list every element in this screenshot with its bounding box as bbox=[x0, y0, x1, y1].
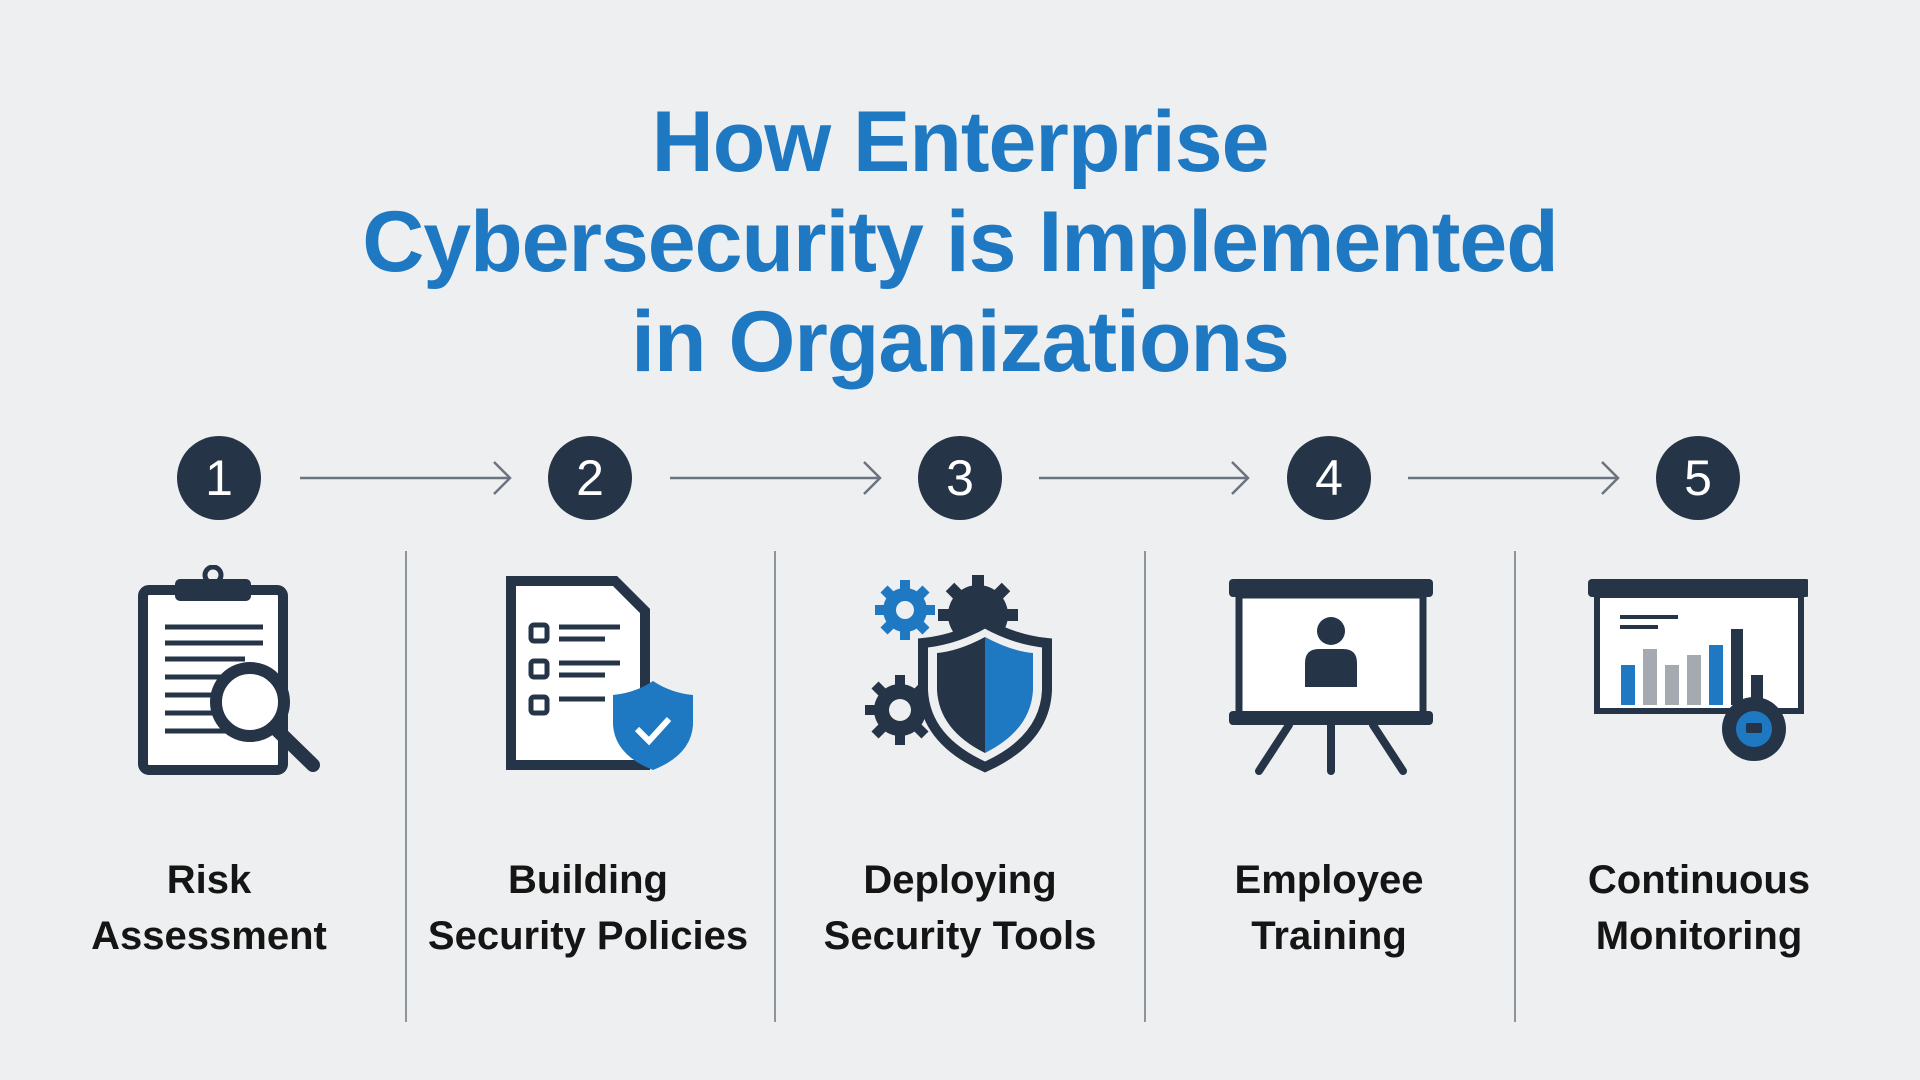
number 4: 4 bbox=[1315, 450, 1343, 506]
number 2: 2 bbox=[576, 450, 604, 506]
label 1: Assessment bbox=[91, 914, 327, 958]
icon: monitoring dashboard bbox=[1588, 579, 1808, 761]
label 3: Security Tools bbox=[824, 914, 1096, 958]
label 3: Deploying bbox=[863, 858, 1057, 902]
icon: presentation board bbox=[1229, 579, 1433, 775]
number 3 bbox=[918, 436, 1002, 520]
number 4 bbox=[1287, 436, 1371, 520]
label 1: Risk bbox=[167, 858, 251, 902]
icon: gears and shield bbox=[865, 575, 1052, 772]
label 5 bbox=[1588, 858, 1810, 958]
label 2 bbox=[428, 858, 748, 958]
icon: policy document with shield bbox=[506, 576, 693, 770]
label 2: Building bbox=[508, 858, 668, 902]
number 2 bbox=[548, 436, 632, 520]
number 5 bbox=[1656, 436, 1740, 520]
title: How Enterprise bbox=[652, 94, 1268, 190]
title: in Organizations bbox=[631, 294, 1289, 390]
label 4 bbox=[1235, 858, 1423, 958]
step numbers and arrows bbox=[177, 436, 1740, 520]
label 5: Continuous bbox=[1588, 858, 1810, 902]
number 5: 5 bbox=[1684, 450, 1712, 506]
label 5: Monitoring bbox=[1596, 914, 1802, 958]
label 4: Employee bbox=[1235, 858, 1423, 902]
label 2: Security Policies bbox=[428, 914, 748, 958]
title: Cybersecurity is Implemented bbox=[362, 194, 1558, 290]
arrows bbox=[300, 461, 1620, 495]
label 1 bbox=[91, 858, 327, 958]
number 1: 1 bbox=[205, 450, 233, 506]
label 4: Training bbox=[1251, 914, 1407, 958]
title bbox=[362, 94, 1558, 390]
number 3: 3 bbox=[946, 450, 974, 506]
label 3 bbox=[824, 858, 1096, 958]
icon: clipboard with magnifier bbox=[138, 565, 320, 775]
number 1 bbox=[177, 436, 261, 520]
